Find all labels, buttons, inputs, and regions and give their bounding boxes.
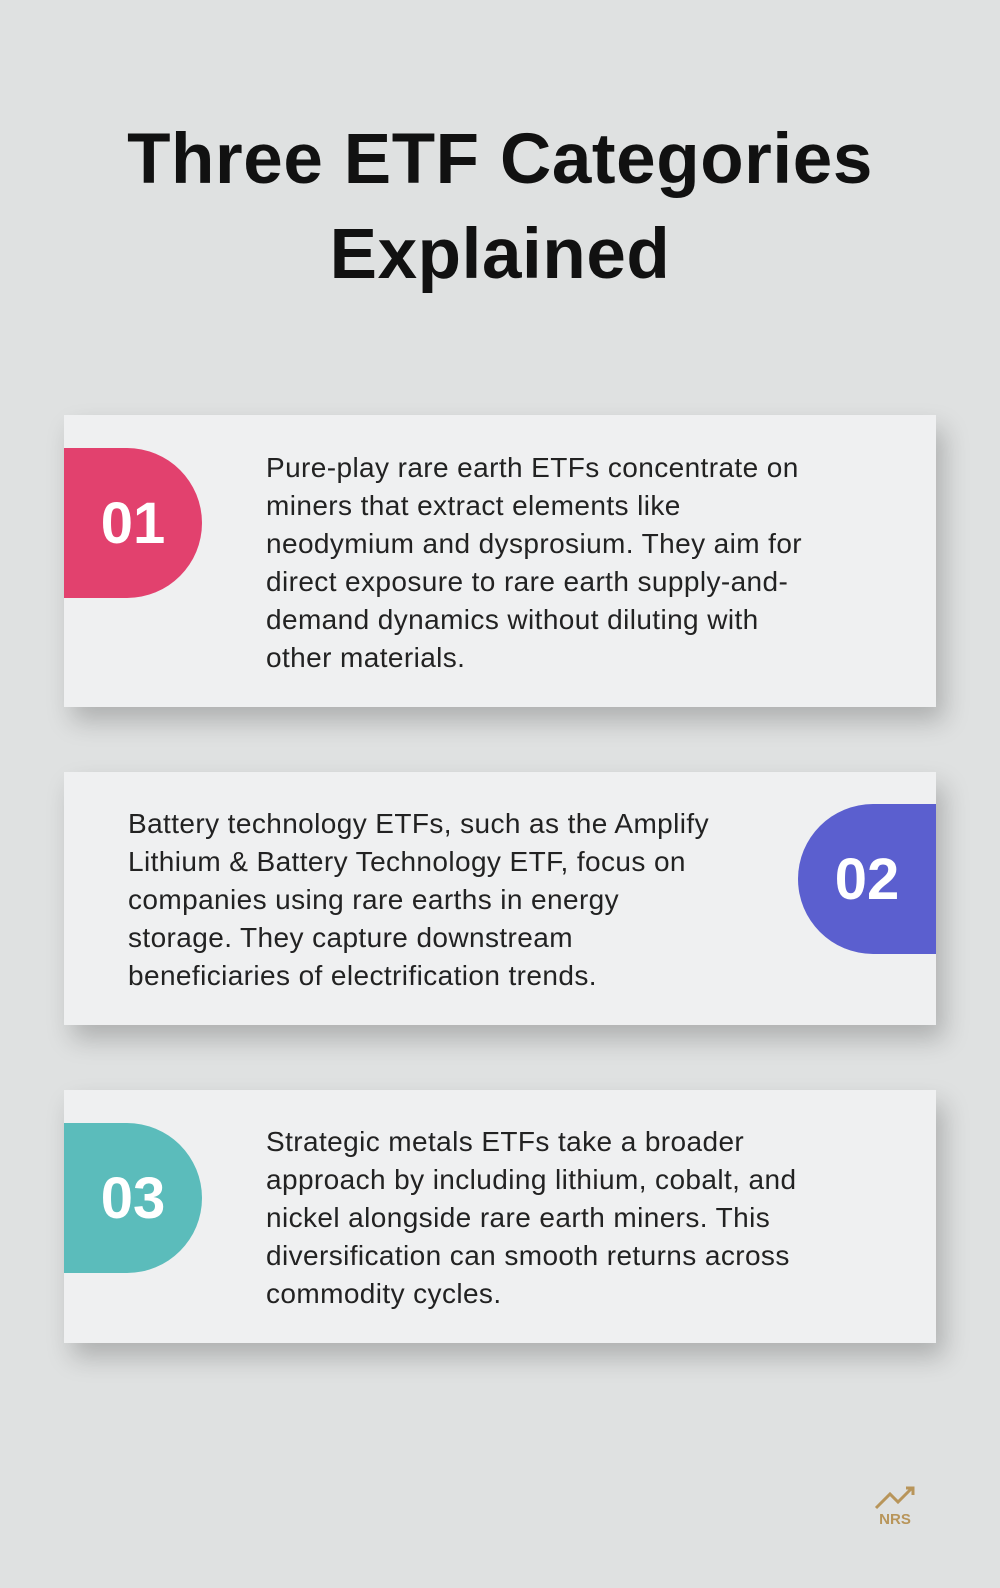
badge 03 [64, 1123, 202, 1273]
text 2: storage. They capture downstream [128, 922, 573, 953]
text 2: companies using rare earths in energy [128, 884, 619, 915]
text 3: Strategic metals ETFs take a broader [266, 1126, 744, 1157]
text 2: beneficiaries of electrification trends. [128, 960, 597, 991]
text 2: Battery technology ETFs, such as the Amplify [128, 808, 709, 839]
text 3: commodity cycles. [266, 1278, 502, 1309]
text 1: miners that extract elements like [266, 490, 681, 521]
panel: card 1 [64, 415, 936, 707]
text 3: nickel alongside rare earth miners. This [266, 1202, 770, 1233]
text 1: neodymium and dysprosium. They aim for [266, 528, 802, 559]
logo: NRS [879, 1511, 911, 1528]
title [127, 120, 873, 294]
text 3: diversification can smooth returns across [266, 1240, 790, 1271]
panel: card 3 [64, 1090, 936, 1343]
text 3: approach by including lithium, cobalt, and [266, 1164, 796, 1195]
badge 01 [64, 448, 202, 598]
title: Three ETF Categories [127, 120, 873, 199]
text 1: Pure-play rare earth ETFs concentrate on [266, 452, 799, 483]
panel: card 2 [64, 772, 936, 1025]
text 3 [266, 1126, 796, 1309]
badge 02 [798, 804, 936, 954]
badge 01: 01 [101, 490, 165, 556]
text 1: other materials. [266, 642, 465, 673]
text 1: direct exposure to rare earth supply-and- [266, 566, 788, 597]
text 1: demand dynamics without diluting with [266, 604, 759, 635]
text 1 [266, 452, 802, 673]
badge 02: 02 [835, 846, 899, 912]
text 2: Lithium & Battery Technology ETF, focus on [128, 846, 686, 877]
text 2 [128, 808, 709, 991]
logo [875, 1486, 914, 1528]
badge 03: 03 [101, 1166, 165, 1230]
title: Explained [330, 215, 670, 294]
